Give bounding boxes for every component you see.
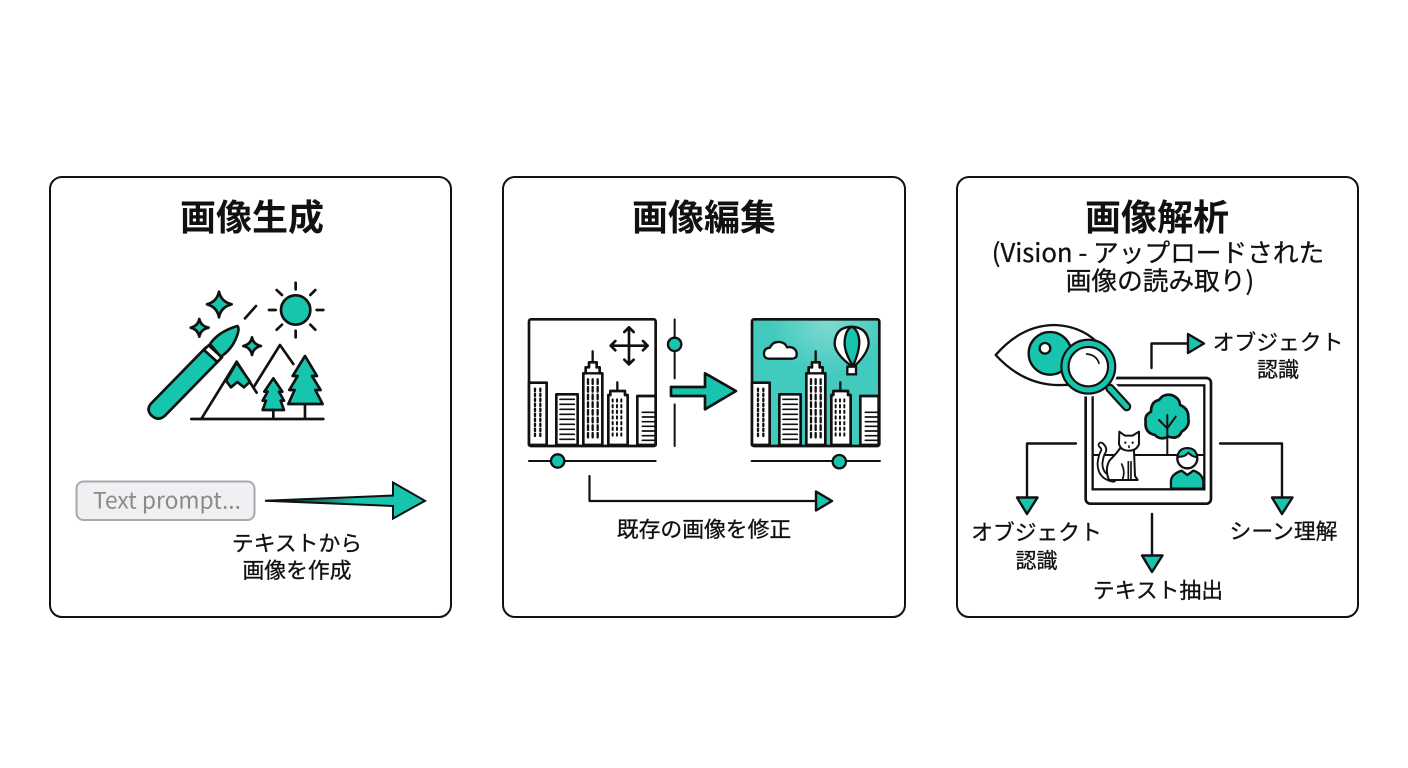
icon: pen, sparkles, sun, mountains and trees: [149, 283, 323, 419]
icon: cloud: [764, 342, 797, 359]
caption: create image from text: テキストから: [232, 527, 362, 558]
label: object recognition top: 認識: [1257, 354, 1299, 384]
icon: tree: [1145, 395, 1189, 455]
icon: mountains: [202, 345, 293, 418]
subheading: vision description: (Vision - アップロードされた: [992, 233, 1324, 270]
arrow: left: [1017, 444, 1076, 514]
icon: photo frame: [1086, 378, 1211, 504]
caption: create image from text: 画像を作成: [242, 554, 352, 585]
text prompt box: Text prompt...: [93, 482, 241, 516]
icon: magnifier: [1065, 343, 1127, 407]
illustration: eye, magnifier and photo: [996, 325, 1211, 504]
panel: image editing: [503, 177, 905, 617]
panel: image analysis: [957, 177, 1358, 617]
label: object recognition left: 認識: [1016, 545, 1058, 575]
slider: horizontal, right: [752, 455, 880, 468]
icon: cat: [1100, 432, 1139, 480]
icon: move arrows: [611, 327, 648, 364]
subheading: vision description: 画像の読み取り): [1066, 261, 1254, 298]
heading: image generation: 画像生成: [180, 189, 324, 241]
arrow: before to after: [671, 373, 736, 409]
illustration: edited city image: [752, 319, 879, 446]
arrow: prompt to image: [265, 482, 425, 518]
panel: image generation: [50, 177, 451, 617]
caption: modify existing image: 既存の画像を修正: [617, 513, 791, 544]
heading: image analysis: 画像解析: [1085, 189, 1229, 241]
white halo around magnifier: [1063, 341, 1127, 407]
arrow: right: [1220, 444, 1292, 514]
icon: pen: [149, 326, 239, 419]
heading: image editing: 画像編集: [632, 189, 776, 241]
arrow: top right: [1152, 334, 1204, 368]
icon: trees: [191, 356, 323, 419]
arrow: modify existing image: [590, 476, 832, 510]
icon: eye: [996, 325, 1097, 385]
label: scene understanding: シーン理解: [1230, 515, 1337, 546]
slider: vertical: [668, 319, 681, 446]
slider: horizontal, left: [529, 454, 656, 468]
icon: person: [1171, 448, 1203, 489]
label: text extraction: テキスト抽出: [1093, 574, 1223, 605]
icon: sparkles: [191, 292, 261, 355]
label: object recognition top: オブジェクト: [1213, 326, 1343, 357]
icon: sun: [269, 283, 323, 337]
illustration: original city image: [529, 319, 681, 468]
label: object recognition left: オブジェクト: [971, 516, 1102, 547]
icon: hot air balloon: [835, 327, 869, 374]
arrow: bottom: [1142, 514, 1162, 572]
